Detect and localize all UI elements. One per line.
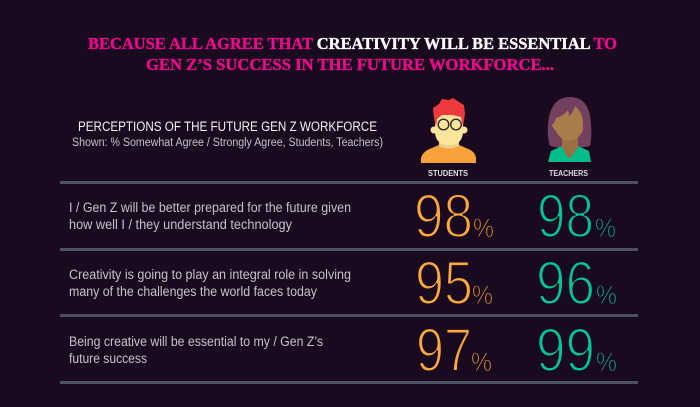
row 2: 95 — [415, 249, 473, 317]
row 1: % — [595, 213, 616, 243]
table heading: PERCEPTIONS OF THE FUTURE GEN Z WORKFORCE — [78, 119, 377, 134]
row 1: 98 — [537, 182, 594, 250]
row 2 — [69, 249, 617, 317]
row 3 — [69, 316, 617, 384]
row 3: future success — [69, 351, 147, 366]
column label: students: STUDENTS — [428, 169, 469, 178]
row 3: Being creative will be essential to my / Gen Z’s — [69, 334, 323, 349]
row 1: how well I / they understand technology — [69, 217, 292, 232]
title — [88, 34, 617, 74]
row 1: % — [473, 213, 494, 243]
table heading — [72, 119, 383, 149]
row 2: many of the challenges the world faces today — [69, 284, 317, 299]
row 3: % — [596, 347, 617, 377]
row 1 — [69, 182, 616, 250]
row 2: Creativity is going to play an integral role in solving — [69, 267, 351, 282]
row 3: 99 — [536, 316, 595, 384]
title: GEN Z’S SUCCESS IN THE FUTURE WORKFORCE... — [146, 55, 554, 74]
row 3: 97 — [416, 316, 472, 384]
row 2: 96 — [536, 249, 595, 317]
title: BECAUSE ALL AGREE THAT CREATIVITY WILL BE ESSENTIAL TO — [88, 34, 617, 53]
row 2: % — [596, 280, 617, 310]
row 2: % — [472, 280, 493, 310]
row 3: % — [471, 347, 492, 377]
icon: student — [421, 98, 476, 163]
icon: teacher — [548, 97, 591, 162]
row 1: I / Gen Z will be better prepared for the future given — [69, 200, 351, 215]
table heading: Shown: % Somewhat Agree / Strongly Agree, Students, Teachers) — [72, 137, 383, 149]
row 1: 98 — [414, 182, 473, 250]
column label: teachers: TEACHERS — [549, 169, 589, 178]
